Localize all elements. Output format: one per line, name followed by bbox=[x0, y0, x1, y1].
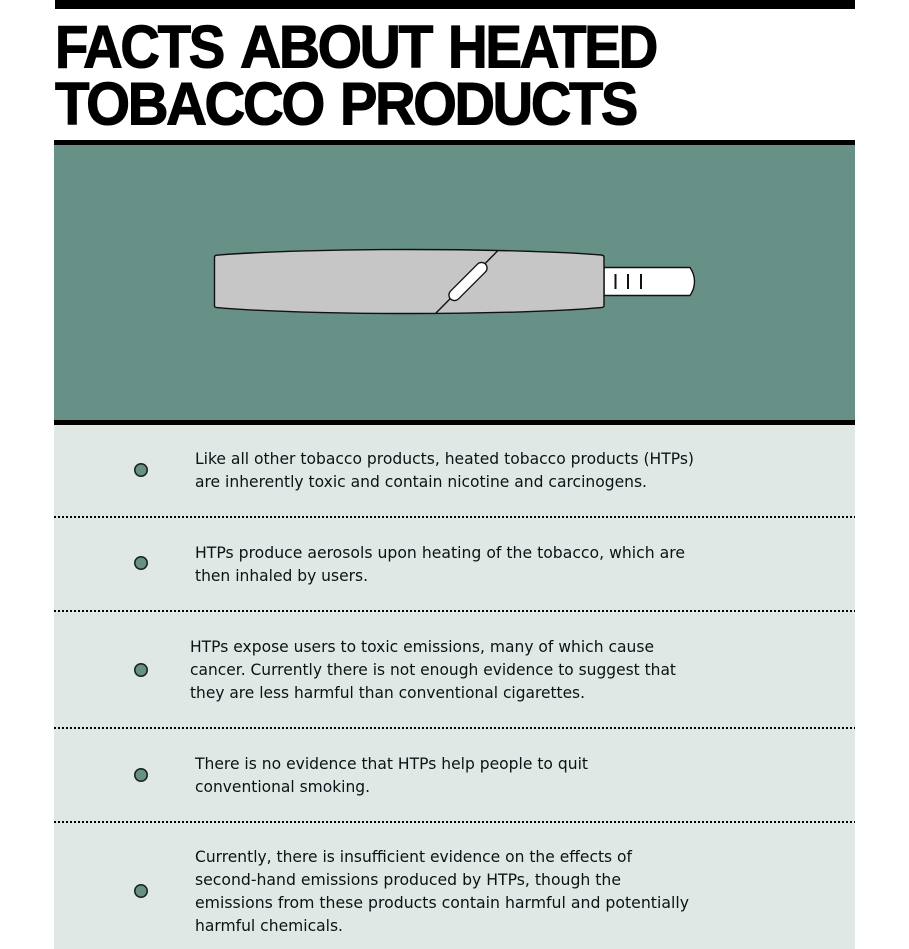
title: ABOUT bbox=[240, 14, 433, 80]
device body bbox=[214, 250, 604, 314]
fact 3: they are less harmful than conventional cigarettes. bbox=[190, 684, 585, 702]
panel: illustration bbox=[54, 140, 855, 425]
title: TOBACCO bbox=[55, 70, 324, 138]
title: FACTS bbox=[55, 14, 223, 80]
title: PRODUCTS bbox=[340, 70, 636, 138]
panel: facts bbox=[54, 425, 855, 949]
fact 5 bbox=[135, 848, 689, 935]
fact 1 bbox=[135, 450, 694, 491]
fact 1: are inherently toxic and contain nicotine and carcinogens. bbox=[195, 473, 647, 491]
fact 5: second-hand emissions produced by HTPs, though the bbox=[195, 871, 621, 889]
fact 2: HTPs produce aerosols upon heating of the tobacco, which are bbox=[195, 544, 685, 562]
fact 5: Currently, there is insufficient evidence on the effects of bbox=[195, 848, 633, 866]
title: HEATED bbox=[448, 14, 656, 80]
title bbox=[55, 14, 656, 138]
fact 4: There is no evidence that HTPs help people to quit bbox=[194, 755, 588, 773]
fact 4 bbox=[135, 755, 588, 796]
device tip bbox=[604, 268, 694, 296]
fact 3 bbox=[135, 638, 676, 702]
fact 5: emissions from these products contain harmful and potentially bbox=[195, 894, 689, 912]
fact 5: harmful chemicals. bbox=[195, 917, 343, 935]
device button bbox=[454, 268, 482, 295]
icon: heated tobacco device bbox=[214, 250, 694, 314]
fact 3: HTPs expose users to toxic emissions, many of which cause bbox=[190, 638, 654, 656]
fact 2: then inhaled by users. bbox=[195, 567, 368, 585]
fact 2 bbox=[135, 544, 685, 585]
device seam bbox=[436, 250, 498, 314]
fact 3: cancer. Currently there is not enough evidence to suggest that bbox=[190, 661, 676, 679]
fact 1: Like all other tobacco products, heated tobacco products (HTPs) bbox=[195, 450, 694, 468]
fact 4: conventional smoking. bbox=[195, 778, 370, 796]
